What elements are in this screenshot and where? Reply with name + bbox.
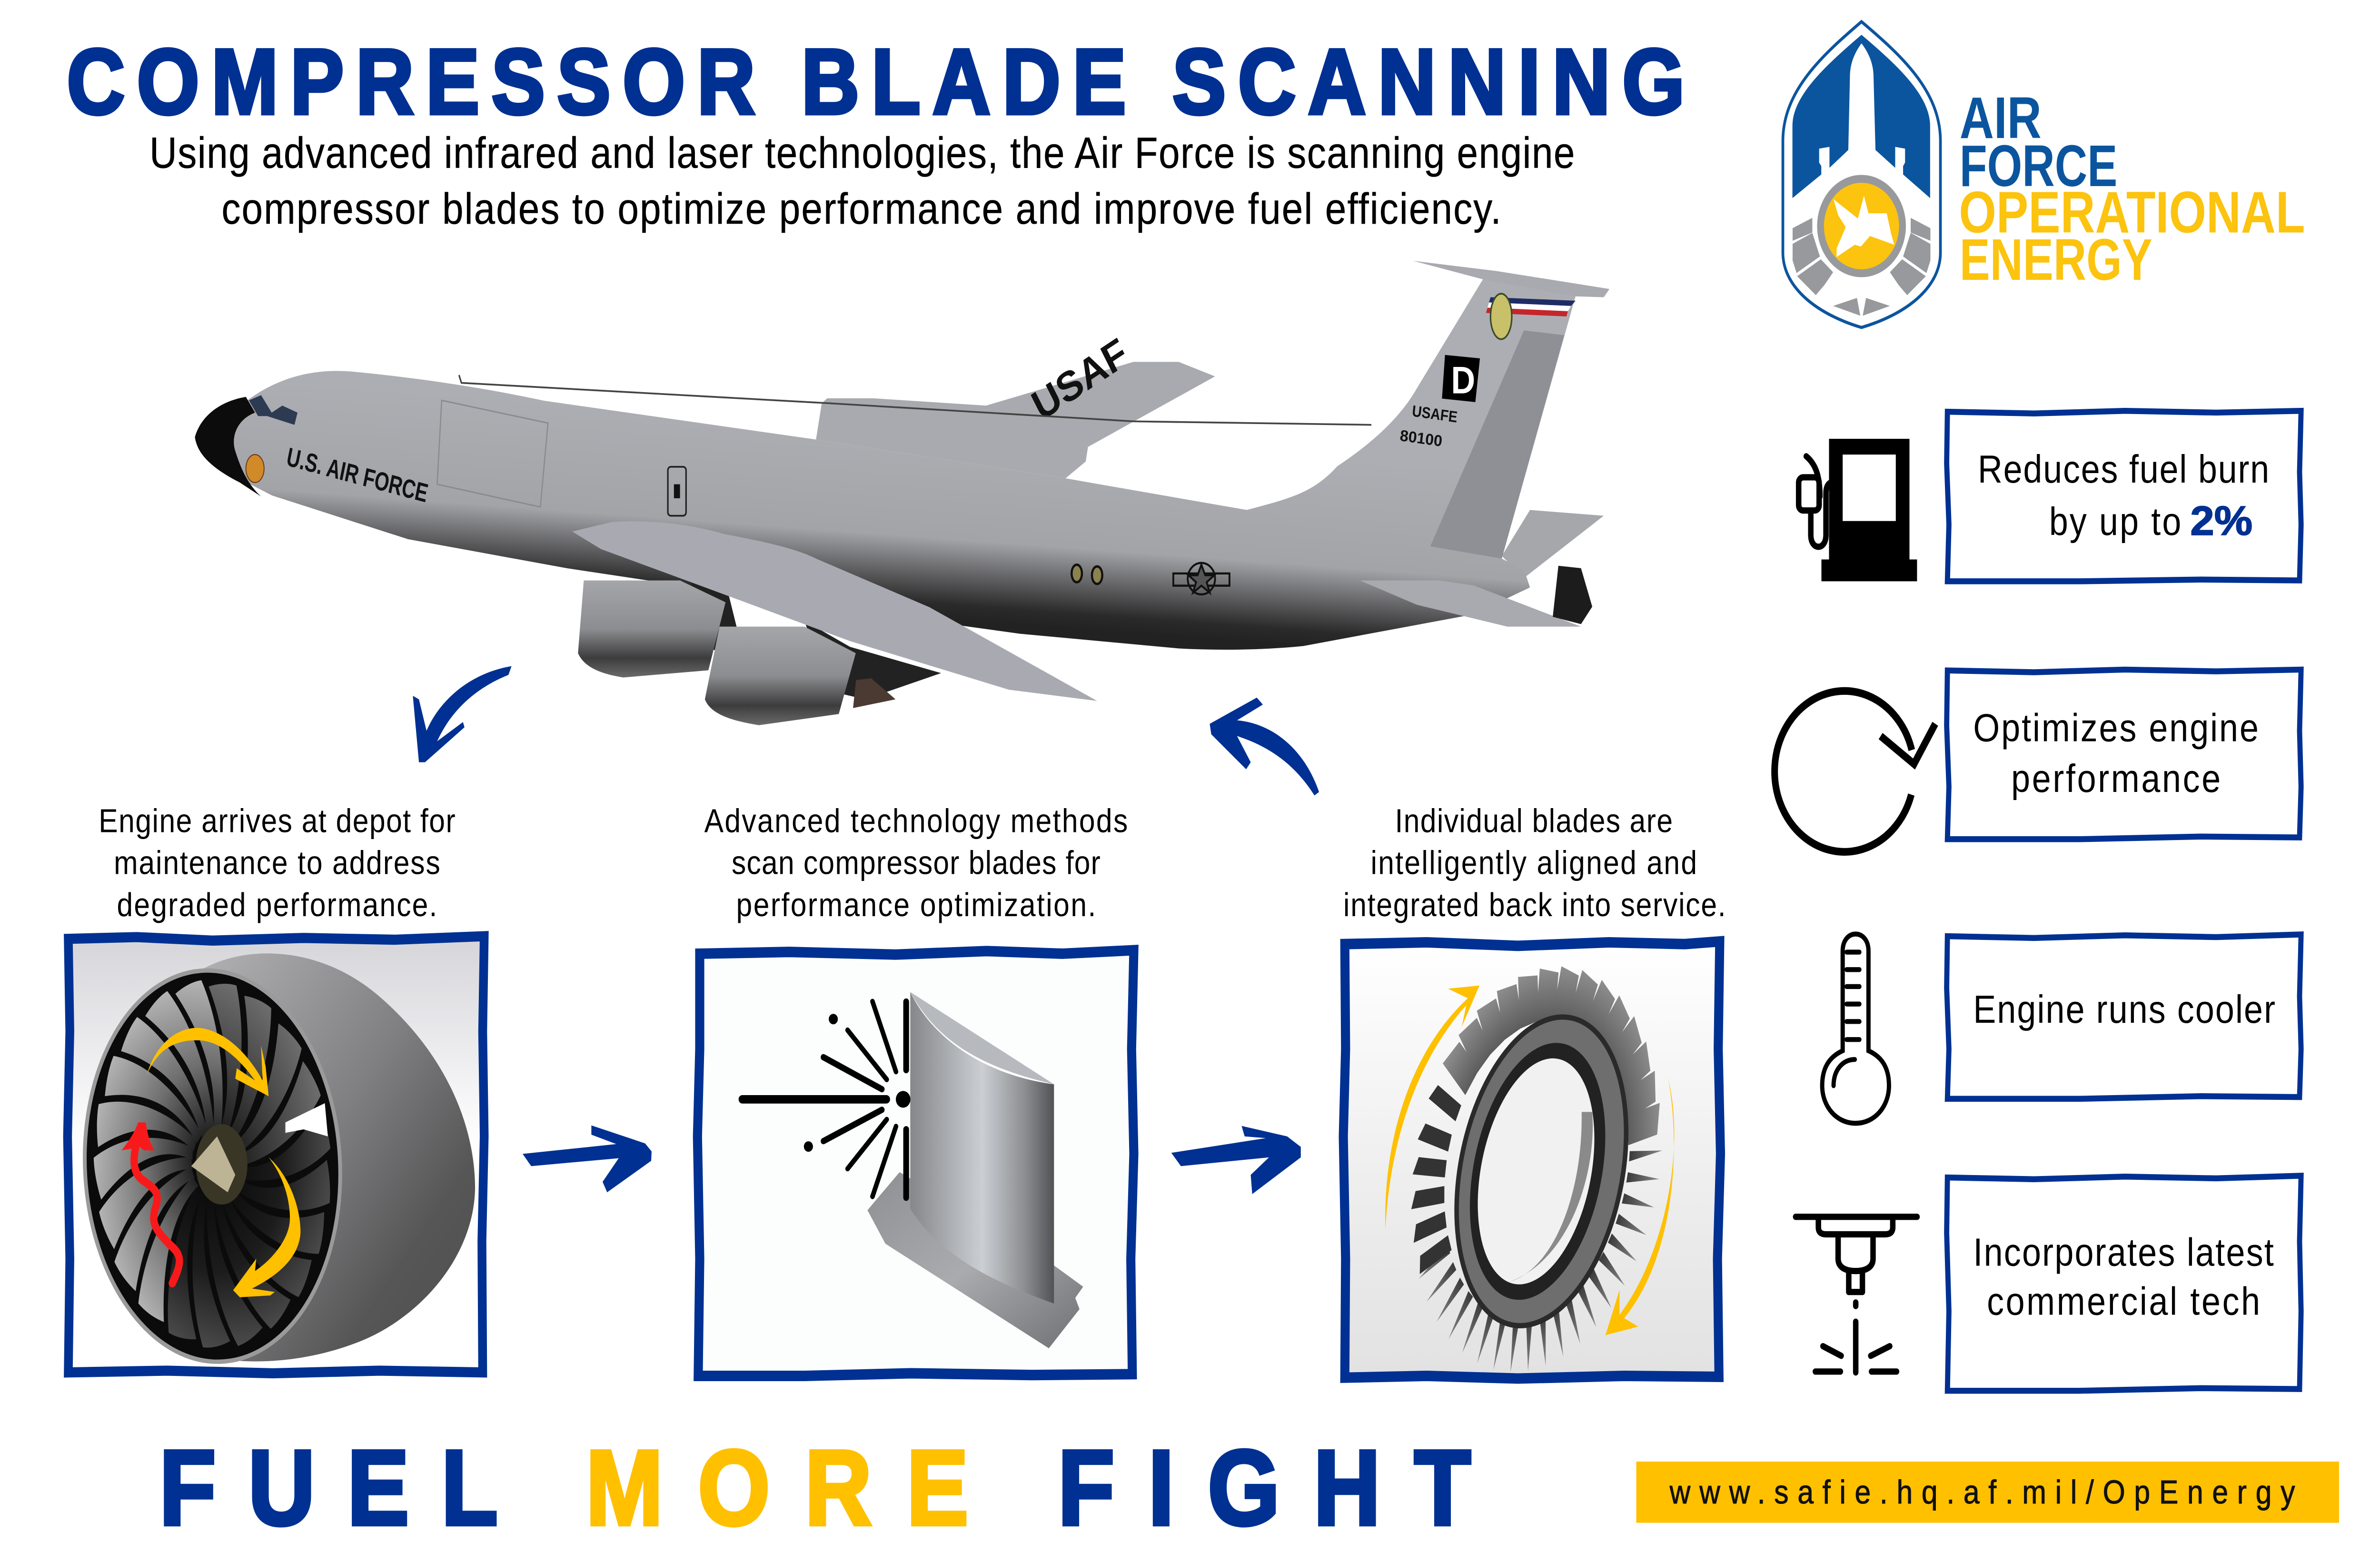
box: optimizes engine: Optimizes engine [1973,706,2259,750]
fin cap [1413,261,1609,297]
blade top face [910,992,1054,1084]
box: reduces fuel burn: Reduces fuel burn [1978,447,2269,491]
central roundel [1821,179,1903,273]
panel frame [1343,941,1720,1379]
step 3 caption [1343,802,1726,923]
arrow: step 2 to step 3 [1171,1126,1301,1194]
yellow rotation arrow top [147,1028,268,1096]
logo: Air Force Operational Energy [1783,22,2305,327]
step 2 caption: Advanced technology methods [704,802,1128,840]
arrow: blades back to aircraft [1210,698,1319,795]
yellow rotation arrow right [1606,1078,1674,1335]
box: latest commercial tech: commercial tech [1987,1280,2260,1324]
intro text: compressor blades to optimize performance and improve fuel efficiency. [222,185,1501,233]
aircraft lettering: U.S. AIR FORCE [284,442,430,508]
pylons [691,577,941,699]
illustration: KC-135 tanker aircraft [195,261,1609,725]
logo wordmark [1959,86,2305,292]
nacelle [198,953,475,1362]
laser burst [742,1001,906,1197]
slogan [159,1428,1471,1542]
fin flag stripes [1486,297,1576,316]
USAFE and serial: 80100 [1399,426,1443,450]
cockpit windows [249,395,298,425]
step 3 caption: intelligently aligned and [1370,844,1697,881]
door [668,467,686,516]
exhaust [853,678,895,708]
ring hole [1459,1044,1613,1298]
website bar [1636,1462,2339,1523]
icon: fuel pump [1799,439,1917,581]
panel frame [697,950,1134,1376]
door window [674,484,680,498]
box: optimizes engine [1947,670,2301,839]
roundel [1173,563,1230,594]
static ports [1071,565,1102,584]
step 1 caption: degraded performance. [117,886,437,923]
step 3 caption: integrated back into service. [1343,886,1726,923]
website bar: www.safie.hq.af.mil/OpEnergy [1669,1473,2295,1511]
tail cone [1553,566,1592,624]
USAFE and serial: USAFE [1411,402,1458,426]
box: reduces fuel burn: by up to [2049,500,2181,544]
nose art [246,455,264,483]
icon: laser head [1795,1217,1917,1373]
step 2 caption: scan compressor blades for [732,844,1101,881]
title: COMPRESSOR BLADE SCANNING [67,30,1685,133]
arrow: step 1 to step 2 [523,1126,652,1192]
logo wordmark: AIR [1960,86,2042,151]
ring inner wall [1510,1112,1593,1282]
arrow: aircraft to engine [413,666,512,762]
burst dots [804,1014,911,1152]
engine 2 [705,627,856,725]
intro text [149,128,1575,233]
box: engine runs cooler: Engine runs cooler [1973,988,2275,1031]
box: latest commercial tech [1947,1176,2301,1391]
box: reduces fuel burn: 2% [2190,498,2252,544]
rudder [1430,330,1564,559]
wing marking USAF: USAF [1025,329,1135,429]
step 1 caption: maintenance to address [114,844,440,881]
step 3 caption: Individual blades are [1395,802,1673,840]
panel background [700,953,1132,1376]
blade root [867,1172,1083,1348]
step 1 caption: Engine arrives at depot for [99,802,456,840]
fan blades [78,963,347,1367]
box: optimizes engine: performance [2011,757,2221,801]
shield blue field with rocket [1793,35,1930,198]
yellow rotation arrow left [1385,986,1479,1229]
blade body [910,992,1054,1304]
step 1 caption [99,802,456,923]
jet silhouette [1834,196,1894,257]
rotor blades [1375,935,1698,1404]
ring inner band [1448,1027,1627,1316]
rotor ring [1430,996,1653,1346]
hub cone [191,1124,248,1205]
panel background [68,939,483,1373]
radome [195,397,261,496]
box: engine runs cooler [1947,934,2301,1099]
fan gap [285,1103,328,1137]
yellow rotation arrow bottom [233,1157,300,1297]
box: latest commercial tech: Incorporates latest [1973,1231,2274,1275]
logo wordmark: ENERGY [1960,227,2152,292]
fuselage and fin [195,261,1609,650]
logo wordmark: FORCE [1960,134,2117,199]
USAFE and serial [1399,402,1458,450]
refuelling line [459,375,1371,425]
near wing [572,521,1097,701]
near stabilizer [1360,581,1581,627]
red heat arrow [121,1122,179,1283]
box: reduces fuel burn [1947,411,2301,581]
panel: engine illustration [68,936,484,1374]
panel: rotor ring illustration [1343,935,1720,1404]
fan opening [73,960,352,1372]
step 2 caption: performance optimization. [736,886,1096,923]
panel outlines [437,400,548,507]
fin badge [1490,294,1512,339]
intro text: Using advanced infrared and laser technologies, the Air Force is scanning engine [149,128,1575,178]
step 2 caption [704,802,1128,923]
far stabilizer [1502,510,1604,578]
panel: blade scan illustration [697,950,1134,1376]
far wing [816,362,1215,478]
engine 1 [578,581,725,677]
panel background [1345,944,1720,1376]
icon: thermometer [1822,934,1889,1123]
panel frame [68,936,484,1374]
shield outline [1783,22,1941,327]
fin letter D [1442,355,1480,402]
grey segments [1793,218,1930,316]
fin letter D: D [1451,359,1475,402]
logo wordmark: OPERATIONAL [1959,180,2305,245]
icon: performance cycle [1775,691,1935,852]
